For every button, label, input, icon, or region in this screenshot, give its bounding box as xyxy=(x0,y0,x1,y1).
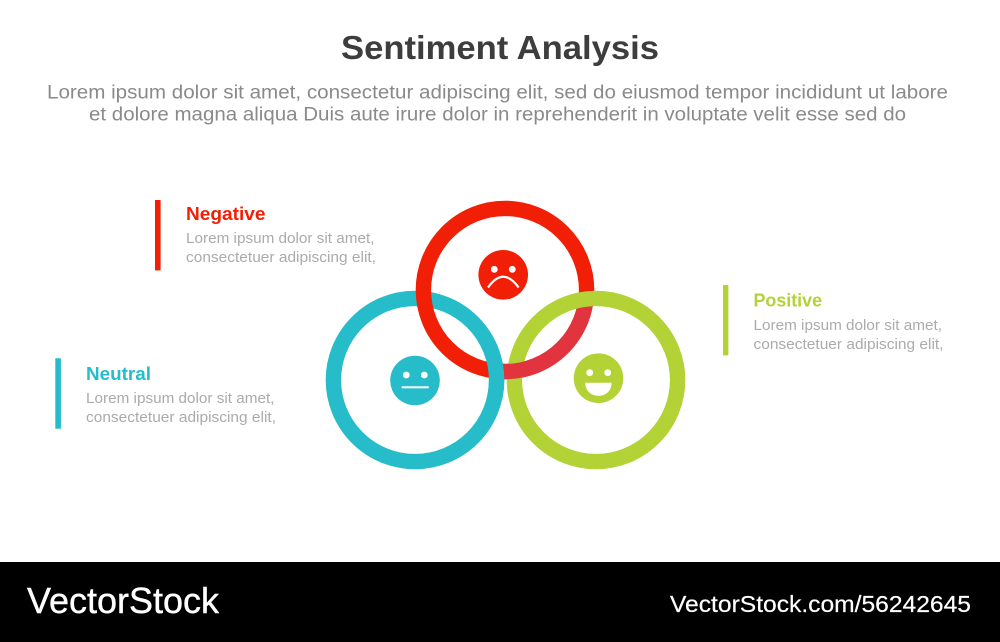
crimson overlap arc xyxy=(503,306,593,380)
teal ring xyxy=(333,298,497,462)
negative accent bar xyxy=(155,200,161,270)
teal arc over crimson xyxy=(477,340,504,400)
positive heading: Positive xyxy=(754,290,822,310)
red ring xyxy=(423,208,587,372)
negative description: Lorem ipsum dolor sit amet, xyxy=(186,231,374,247)
neutral accent bar xyxy=(55,358,61,429)
icon: neutral face xyxy=(390,356,440,405)
panel: neutral label xyxy=(55,358,276,429)
panel: positive label xyxy=(723,285,944,355)
positive description xyxy=(754,318,944,353)
panel: negative label xyxy=(155,200,376,270)
footer url: VectorStock.com/56242645 xyxy=(670,591,971,617)
negative heading: Negative xyxy=(186,204,266,224)
neutral heading: Neutral xyxy=(86,364,151,384)
negative description: consectetuer adipiscing elit, xyxy=(186,250,376,266)
subtitle text block xyxy=(47,82,948,126)
neutral description xyxy=(86,391,276,426)
footer logo: VectorStock xyxy=(27,580,220,621)
positive accent bar xyxy=(723,285,728,355)
subtitle text block: Lorem ipsum dolor sit amet, consectetur adipiscing elit, sed do eiusmod tempor incididunt ut labore xyxy=(47,82,948,104)
icon: sad face xyxy=(478,250,528,300)
positive description: consectetuer adipiscing elit, xyxy=(754,337,944,353)
title: Sentiment Analysis xyxy=(341,29,659,66)
subtitle text block: et dolore magna aliqua Duis aute irure dolor in reprehenderit in voluptate velit esse sed do xyxy=(89,104,906,126)
neutral description: consectetuer adipiscing elit, xyxy=(86,410,276,426)
footer bar xyxy=(0,562,1000,642)
neutral description: Lorem ipsum dolor sit amet, xyxy=(86,391,274,407)
positive description: Lorem ipsum dolor sit amet, xyxy=(754,318,942,334)
icon: happy face xyxy=(574,353,623,403)
green ring xyxy=(514,298,678,462)
negative description xyxy=(186,231,376,266)
interlocking circles diagram xyxy=(333,208,678,462)
crimson arc over green ring xyxy=(503,356,538,380)
